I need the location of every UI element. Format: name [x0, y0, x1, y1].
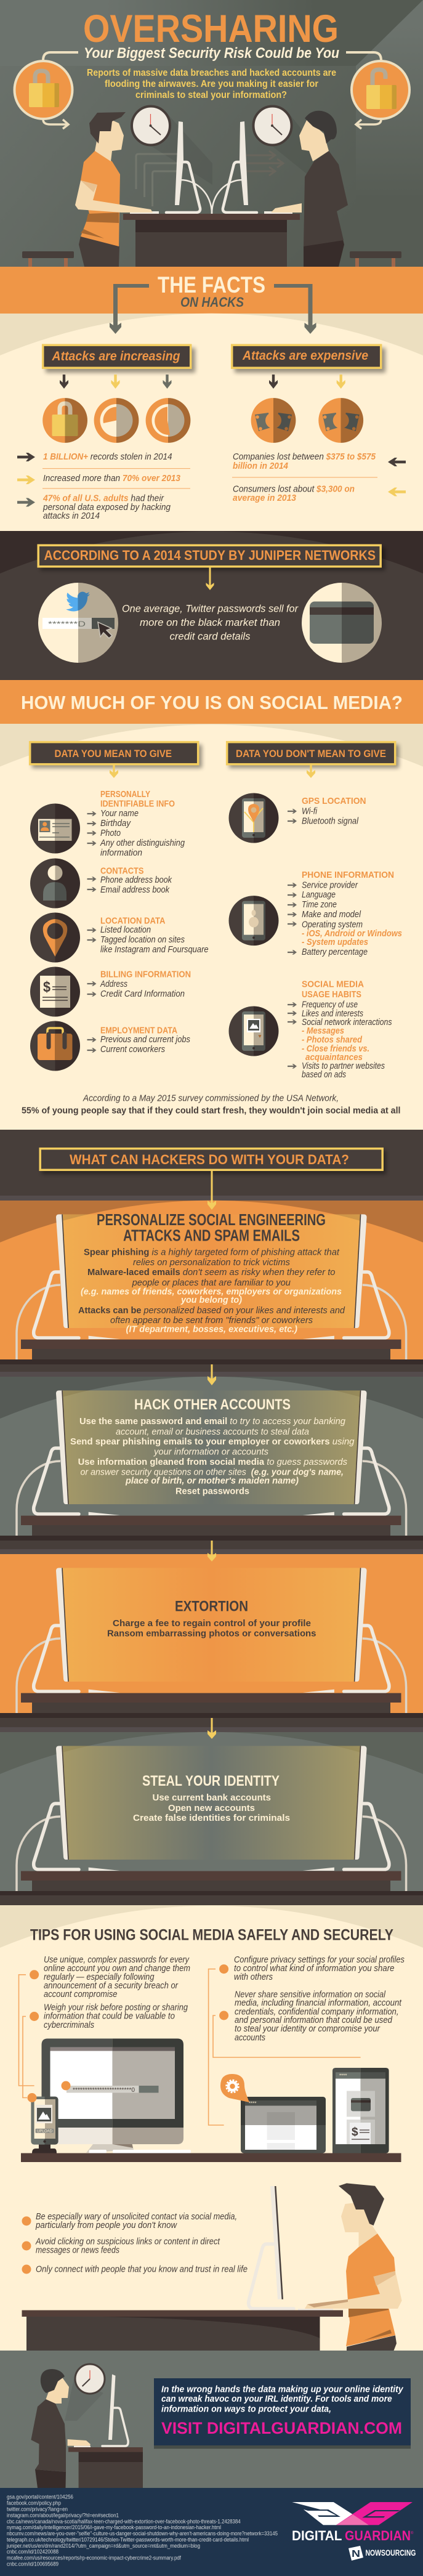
connector lines	[18, 1969, 361, 2125]
icon: money circle two	[318, 398, 363, 443]
sources list: cnbc.com/id/100695689	[7, 2561, 58, 2567]
icon: right wall clock	[254, 106, 292, 145]
heading box: attacks are expensive: Attacks are expensive	[242, 349, 368, 363]
text block: hack body: Use information gleaned from social media to guess passwords	[78, 1457, 347, 1467]
bottom tips: Avoid clicking on suspicious links or content in direct	[35, 2237, 220, 2247]
logo: digital guardian	[292, 2502, 414, 2543]
heading: personalize social engineering: PERSONALIZE SOCIAL ENGINEERING	[97, 1210, 326, 1229]
sources list: facebook.com/policy.php	[7, 2500, 61, 2506]
stats: attacks are increasing: personal data exposed by hacking	[42, 503, 171, 512]
text block: personalize body: (IT department, bosses, executives, etc.)	[126, 1324, 297, 1334]
sources list: cbc.ca/news/canada/nova-scotia/halifax-teen-charged-with-extortion-over-facebook-photo-threats-1.2428384	[7, 2517, 241, 2524]
illustration: tablet portrait: $	[352, 2126, 358, 2139]
monitor frame and desk	[17, 1568, 406, 1713]
arrows: down to icons	[60, 375, 345, 389]
callout box: information on ways to protect your data,	[161, 2404, 331, 2414]
text block: hack body: or answer security questions on other sites (e.g. your dog's name,	[80, 1467, 344, 1477]
text block: personalize body: relies on personalization to trick victims	[133, 1258, 290, 1268]
bottom tips: Only connect with people that you know and trust in real life	[36, 2264, 248, 2274]
icon: 47 percent pie	[146, 398, 190, 443]
floor band three	[0, 1713, 423, 1732]
heading: extortion: EXTORTION	[175, 1598, 248, 1615]
text block: social media usage habits	[288, 979, 392, 1080]
text block: phone information: Service provider	[302, 881, 358, 891]
logo: digital guardian: DIGITAL	[292, 2528, 342, 2543]
stats: attacks are expensive	[232, 452, 377, 503]
person: tips, orange shirt	[305, 2183, 402, 2351]
desk: tips	[21, 2153, 401, 2162]
tip: passwords	[44, 1955, 190, 1999]
text block: phone information	[288, 870, 402, 957]
icon: briefcase	[30, 1021, 80, 1071]
heading box: juniper study: ACCORDING TO A 2014 STUDY BY JUNIPER NETWORKS	[44, 548, 376, 563]
bullet dots	[30, 1964, 228, 2021]
text block: phone information: Time zone	[302, 900, 337, 910]
data arrows behind monitors	[136, 151, 283, 206]
panel: steal your identity	[0, 1732, 423, 1891]
panel: call to action	[0, 2351, 423, 2488]
icon: twitter password	[38, 583, 118, 663]
intro text: criminals to steal your information?	[135, 90, 287, 100]
text block: personalize body: people or places that are familiar to you	[132, 1278, 291, 1288]
text block: location data: Tagged location on sites	[100, 935, 185, 945]
callout box: can wreak havoc on your IRL identity. For tools and more	[161, 2394, 392, 2404]
text block: employment data	[87, 1025, 190, 1055]
heading box: attacks are increasing: Attacks are increasing	[52, 349, 180, 363]
icon: phone with photo	[229, 1007, 278, 1056]
stats: attacks are increasing: 1 BILLION+ records stolen in 2014	[43, 452, 172, 462]
text block: social media usage habits: - Messages	[302, 1026, 344, 1036]
text block: steal body: Open new accounts	[168, 1804, 255, 1813]
tip: weigh your risk	[44, 2003, 188, 2030]
arrow: juniper	[206, 567, 214, 590]
survey text	[22, 1094, 400, 1116]
text block: personally identifiable info: Any other distinguishing	[100, 838, 185, 848]
sources list: nbcumv.com/news/are-you-over-"selfie"-culture-us-danger-social-shutdown-why-aren't-americans-doing-more?network=33145	[7, 2530, 278, 2537]
heading box: what can hackers do: WHAT CAN HACKERS DO WITH YOUR DATA?	[70, 1152, 349, 1167]
text block: phone information: - iOS, Android or Windows	[302, 929, 402, 939]
text block: location data: Listed location	[100, 925, 151, 935]
text block: location data: like Instagram and Foursquare	[100, 945, 209, 955]
heading box: data you don't mean to give	[227, 742, 399, 778]
tip: sensitive information: and personal information that could be used	[235, 2015, 393, 2025]
survey text: According to a May 2015 survey commissioned by the USA Network,	[83, 1094, 339, 1104]
text block: personally identifiable info: PERSONALLY	[100, 789, 150, 800]
text block: extortion body: Charge a fee to regain control of your profile	[113, 1619, 311, 1629]
bottom tips: particularly from people you don't know	[35, 2221, 177, 2230]
text block: contacts: CONTACTS	[100, 866, 144, 876]
panel: social media data	[0, 724, 423, 1130]
monitors back to back	[130, 121, 292, 214]
text block: phone information: PHONE INFORMATION	[302, 870, 394, 880]
tip: passwords: Use unique, complex passwords for every	[44, 1955, 190, 1965]
tip: weigh your risk: cybercriminals	[44, 2020, 94, 2030]
tip: sensitive information: credentials, confidential company information,	[235, 2007, 399, 2017]
study text: One average, Twitter passwords sell for	[122, 602, 299, 615]
tip: passwords: online account you own and change them	[44, 1964, 190, 1974]
text block: phone information: - System updates	[302, 938, 368, 947]
stats: attacks are expensive: billion in 2014	[233, 461, 288, 471]
text block: hack body: Use the same password and email to try to access your banking	[79, 1417, 345, 1427]
text block: steal body: Use current bank accounts	[153, 1793, 271, 1803]
illustration: phone on dock: UPLOAD	[37, 2130, 53, 2134]
arrows: left stats	[17, 453, 35, 506]
social media heading band	[0, 680, 423, 724]
arrow: to attacks are increasing	[110, 284, 149, 334]
text block: location data: LOCATION DATA	[100, 916, 166, 926]
callout box	[154, 2378, 411, 2448]
text block: hack body: Send spear phishing emails to your employer or coworkers using	[70, 1437, 355, 1447]
tip: sensitive information: Never share sensitive information on social	[235, 1990, 386, 1999]
text block: employment data: Previous and current jobs	[100, 1035, 190, 1045]
sources list: telegraph.co.uk/technology/twitter/10729146/Stolen-Twitter-passwords-worth-more-than-credit-card-details.html	[7, 2536, 249, 2543]
heading box: what can hackers do	[40, 1149, 386, 1174]
icon: left wall clock	[132, 106, 170, 145]
callout box: VISIT DIGITALGUARDIAN.COM	[161, 2419, 402, 2437]
bottom tips: messages or news feeds	[36, 2246, 119, 2256]
text block: contacts	[87, 866, 172, 895]
icon: padlock circle	[42, 398, 87, 443]
text block: billing information: Credit Card Information	[100, 989, 185, 999]
text block: extortion body	[107, 1619, 316, 1639]
icon: credit card	[302, 583, 382, 663]
tip: privacy settings: Configure privacy settings for your social profiles	[234, 1955, 405, 1965]
desk	[123, 214, 300, 267]
intro text: Reports of massive data breaches and hacked accounts are	[87, 68, 336, 78]
panel: hackers heading	[0, 1130, 423, 1201]
tip: weigh your risk: Weigh your risk before posting or sharing	[44, 2003, 188, 2013]
social media heading band: HOW MUCH OF YOU IS ON SOCIAL MEDIA?	[21, 692, 403, 713]
text block: contacts: Phone address book	[100, 875, 172, 885]
icon: money circle one	[251, 398, 296, 443]
heading box: attacks are expensive	[232, 345, 385, 373]
person: left, orange shirt	[75, 112, 153, 267]
illustration: desktop computer: ************************0	[73, 2087, 135, 2094]
tip: weigh your risk: information that could be valuable to	[44, 2012, 175, 2022]
illustration: tablet with settings pin	[220, 2074, 326, 2153]
heading box: juniper study	[38, 545, 385, 570]
text block: social media usage habits: - Close friends vs.	[302, 1044, 369, 1054]
tip: privacy settings	[234, 1955, 405, 1982]
text block: contacts: Email address book	[100, 885, 170, 895]
text block: steal body: Create false identities for criminals	[133, 1813, 290, 1823]
study text: more on the black market than	[140, 617, 280, 628]
icon: bill	[30, 967, 80, 1016]
floor band two	[0, 1536, 423, 1554]
sources list: twitter.com/privacy?lang=en	[7, 2506, 68, 2513]
text block: billing information: Address	[100, 979, 127, 989]
text block: steal body	[133, 1793, 290, 1823]
sources list: instagram.com/about/legal/privacy/?hl=en#section1	[7, 2512, 119, 2519]
text block: social media usage habits: based on ads	[302, 1070, 346, 1080]
text block: hack body	[70, 1417, 355, 1497]
text block: phone information: Language	[302, 890, 336, 900]
text block: hack body: account, email or business accounts to steal data	[116, 1427, 309, 1437]
text block: hack body: your information or accounts	[153, 1448, 268, 1457]
survey text: 55% of young people say that if they could start fresh, they wouldn't join social media at all	[22, 1105, 400, 1116]
monitor and desk: cta	[68, 2374, 143, 2488]
text block: phone information: Operating system	[302, 920, 363, 930]
panel: tips	[0, 1905, 423, 2351]
text block: social media usage habits: Visits to partner websites	[302, 1061, 385, 1071]
text block: phone information: Make and model	[302, 910, 361, 920]
panel: juniper study	[0, 531, 423, 680]
text block: personally identifiable info: information	[100, 848, 142, 858]
tip: passwords: regularly — especially following	[44, 1972, 154, 1982]
icon: bill: $	[43, 979, 51, 995]
text block: personally identifiable info: Your name	[100, 809, 139, 819]
heading box: data you mean to give: DATA YOU MEAN TO GIVE	[54, 748, 172, 759]
text block: employment data: Current coworkers	[100, 1045, 165, 1055]
icon: id card	[30, 803, 80, 854]
desk: tips person	[22, 2310, 343, 2351]
footer	[0, 2488, 423, 2576]
icon: phone with map	[229, 793, 278, 843]
stats: attacks are expensive: Companies lost between $375 to $575	[233, 452, 376, 462]
text block: gps location: Bluetooth signal	[302, 817, 359, 827]
logo: nowsourcing	[348, 2546, 416, 2561]
sources list: gsa.gov/portal/content/104256	[7, 2493, 73, 2500]
illustration: tablet portrait	[332, 2068, 389, 2153]
hero section	[0, 0, 423, 267]
text block: social media usage habits: USAGE HABITS	[302, 989, 361, 1000]
illustration: tablet with settings pin: ****	[249, 2100, 256, 2107]
text block: gps location	[288, 796, 366, 827]
study text: credit card details	[170, 631, 251, 642]
floor band four	[0, 1891, 423, 1905]
text block: personalize body: Attacks can be personalized based on your likes and interests and	[78, 1306, 345, 1316]
stats: attacks are increasing: Increased more than 70% over 2013	[43, 474, 180, 484]
text block: social media usage habits: SOCIAL MEDIA	[302, 979, 364, 989]
text block: personalize body: often appear to be sent from "friends" or coworkers	[110, 1316, 313, 1326]
icon: open padlock with connectors	[346, 52, 409, 129]
panel: extortion	[0, 1554, 423, 1713]
person: right, dark shirt and beanie	[271, 111, 348, 267]
tip: privacy settings: with others	[234, 1972, 273, 1982]
heading: personalize social engineering	[97, 1210, 326, 1244]
title: OVERSHARING	[83, 7, 339, 51]
person: cta, beanie	[31, 2369, 91, 2488]
text block: gps location: Wi-fi	[302, 807, 318, 817]
subheading: on hacks: ON HACKS	[180, 294, 244, 310]
text block: billing information: BILLING INFORMATION	[100, 970, 191, 980]
sources list: mcafee.com/us/resources/reports/rp-economic-impact-cybercrime2-summary.pdf	[7, 2554, 181, 2561]
text block: personalize body: Spear phishing is a highly targeted form of phishing attack that	[84, 1248, 340, 1258]
panel: facts	[0, 284, 423, 531]
heading box: data you don't mean to give: DATA YOU DON'T MEAN TO GIVE	[236, 748, 386, 759]
text block: social media usage habits: acquaintances	[305, 1053, 363, 1063]
text block: social media usage habits: Frequency of use	[302, 1000, 358, 1010]
heading box: attacks are increasing	[43, 345, 195, 373]
clock shadow	[65, 2379, 103, 2421]
heading: hack other accounts: HACK OTHER ACCOUNTS	[134, 1396, 291, 1413]
intro text: flooding the airwaves. Are you making it easier for	[105, 79, 318, 89]
stats: attacks are increasing	[42, 452, 190, 521]
text block: personalize body	[78, 1248, 345, 1334]
text block: gps location: GPS LOCATION	[302, 796, 366, 806]
text block: hack body: place of birth, or mother's maiden name)	[125, 1476, 299, 1486]
stools	[22, 251, 401, 267]
tip: sensitive information: media, including financial information, account	[235, 1998, 402, 2008]
icon: cta clock	[75, 2364, 105, 2394]
hero background	[0, 0, 423, 267]
arrows: right stats	[388, 458, 406, 496]
icon: phone with silhouette	[229, 896, 278, 946]
text block: personally identifiable info: Photo	[100, 828, 121, 838]
text block: location data	[87, 916, 209, 955]
facts heading band	[0, 267, 423, 314]
text block: personally identifiable info	[87, 789, 185, 858]
logo: nowsourcing: N	[352, 2549, 360, 2559]
arrows: between hacker panels	[207, 1171, 216, 1739]
tip: sensitive information: accounts	[235, 2033, 265, 2043]
icon: 70 percent pie	[94, 398, 139, 443]
stats: attacks are increasing: 47% of all U.S. adults had their	[42, 494, 164, 504]
panel: hack other accounts	[0, 1377, 423, 1536]
heading: steal your identity: STEAL YOUR IDENTITY	[142, 1773, 280, 1789]
stats: attacks are increasing: attacks in 2014	[43, 511, 100, 521]
sources list: cnbc.com/id/102420088	[7, 2548, 58, 2555]
arrow: to attacks are expensive	[274, 284, 316, 334]
heading box: data you mean to give	[30, 742, 202, 778]
subtitle: Your Biggest Security Risk Could be You	[84, 45, 339, 62]
text block: personalize body: Malware-laced emails don't seem as risky when they refer to	[87, 1268, 335, 1278]
tip: privacy settings: to control what kind of information you share	[234, 1964, 394, 1974]
sources list: juniper.net/us/en/dm/rand2014/?utm_campaign=rd&utm_source=mt&utm_medium=blog	[6, 2542, 200, 2549]
monitor frame and desk	[17, 1746, 406, 1891]
text block: personalize body: (e.g. names of friends, coworkers, employers or organizations	[81, 1287, 342, 1297]
text block: personally identifiable info: IDENTIFIABLE INFO	[100, 798, 175, 809]
text block: social media usage habits: - Photos shared	[302, 1035, 363, 1045]
callout box: In the wrong hands the data making up your online identity	[161, 2384, 403, 2395]
logo: digital guardian: GUARDIAN	[345, 2528, 411, 2543]
stats: attacks are expensive: Consumers lost about $3,300 on	[233, 484, 355, 494]
illustration: tablet portrait: ****	[339, 2073, 347, 2078]
text block: hack body: Reset passwords	[175, 1487, 249, 1497]
text block: employment data: EMPLOYMENT DATA	[100, 1025, 177, 1036]
text block: social media usage habits: Social network interactions	[302, 1018, 392, 1027]
monitor frame and desk	[17, 1390, 406, 1536]
icon: closed padlock with connectors	[15, 52, 78, 129]
icon: location pin	[30, 913, 80, 962]
text block: billing information	[87, 970, 191, 999]
text block: social media usage habits: Likes and interests	[302, 1009, 363, 1019]
icon: twitter password: *******D	[48, 620, 86, 628]
illustration: phone on dock	[27, 2093, 58, 2153]
icon: contact person	[30, 859, 80, 908]
tip: sensitive information: to steal your identity or compromise your	[235, 2024, 381, 2034]
text block: extortion body: Ransom embarrassing photos or conversations	[107, 1629, 316, 1639]
bottom tips	[22, 2212, 248, 2274]
bottom tips: Be especially wary of unsolicited contact via social media,	[36, 2212, 237, 2222]
study text	[122, 602, 299, 642]
monitor: tips person	[249, 2186, 333, 2311]
illustration: desktop computer	[42, 2039, 191, 2153]
tip: sensitive information	[235, 1990, 402, 2043]
tip: passwords: account compromise	[44, 1990, 117, 1999]
heading: the facts: THE FACTS	[158, 272, 265, 298]
intro text	[87, 68, 336, 100]
stats: attacks are expensive: average in 2013	[233, 493, 296, 503]
sources list	[6, 2493, 278, 2567]
text block: personalize body: you belong to)	[180, 1295, 242, 1305]
monitor frame and desk	[17, 1214, 406, 1359]
panel: personalize attacks	[0, 1201, 423, 1359]
heading: personalize social engineering: ATTACKS AND SPAM EMAILS	[123, 1226, 300, 1244]
tip: passwords: announcement of a security breach or	[44, 1981, 179, 1991]
floor band one	[0, 1359, 423, 1377]
text block: phone information: Battery percentage	[302, 947, 368, 957]
sources list: nymag.com/daily/intelligencer/2015/06/i-gave-my-facebook-password-to-an-indonesian-hacker.html	[7, 2524, 221, 2530]
logo: digital guardian: ®	[411, 2531, 414, 2535]
text block: personally identifiable info: Birthday	[100, 819, 131, 828]
